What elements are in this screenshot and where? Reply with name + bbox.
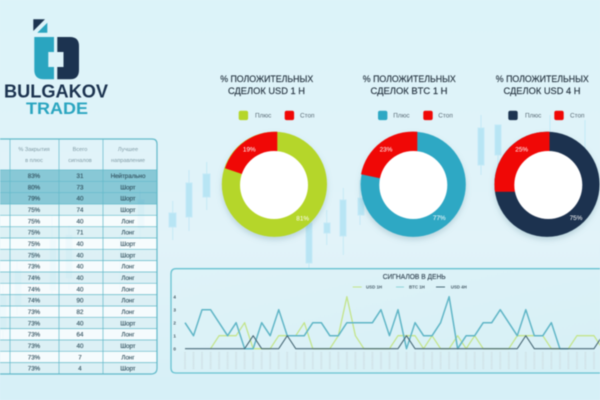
donut chart: 77% — [433, 215, 446, 222]
table rows: 73 — [77, 184, 84, 191]
table rows: 90 — [77, 298, 84, 305]
donut chart: 19% — [243, 146, 256, 154]
panel: donut BTC 1H — [361, 74, 466, 237]
table rows: 74 — [77, 207, 84, 214]
table rows: Нейтрально — [111, 173, 146, 180]
donut chart — [222, 132, 327, 237]
series: USD 4H — [185, 336, 600, 349]
table rows: Лонг — [121, 354, 135, 361]
table rows: 71 — [77, 230, 84, 237]
table rows: Шорт — [120, 320, 136, 327]
table rows: 75% — [28, 207, 41, 214]
donut chart: 25% — [515, 146, 528, 154]
heading: % ПОЛОЖИТЕЛЬНЫХ — [363, 74, 456, 85]
table rows: 40 — [77, 252, 84, 259]
table rows: Лонг — [121, 286, 135, 293]
table rows: 40 — [77, 320, 84, 327]
table rows: 83% — [28, 173, 41, 180]
y axis labels — [173, 294, 176, 351]
table header: направление — [111, 158, 145, 164]
table rows: 74% — [28, 298, 41, 305]
table rows: 40 — [77, 286, 84, 293]
legend: Стоп — [570, 112, 585, 120]
table rows: 73% — [28, 343, 41, 350]
table rows: 7 — [78, 354, 82, 361]
table rows: 73% — [28, 354, 41, 361]
table rows: Шорт — [120, 241, 136, 248]
line series — [185, 297, 600, 349]
table rows: 73% — [28, 332, 41, 339]
panel: donut USD 4H — [494, 74, 600, 237]
table rows: 73% — [28, 320, 41, 327]
legend — [378, 111, 453, 120]
chart legend — [353, 285, 467, 290]
donut chart: 23% — [380, 146, 393, 154]
table rows: Лонг — [121, 230, 135, 237]
table rows: Шорт — [120, 343, 136, 350]
heading: % ПОЛОЖИТЕЛЬНЫХ — [496, 74, 589, 85]
table header: Всего — [73, 147, 87, 153]
table rows: Шорт — [120, 207, 136, 214]
table rows: Лонг — [121, 298, 135, 305]
table rows: 64 — [77, 332, 84, 339]
table rows: Лонг — [121, 275, 135, 282]
table rows: Шорт — [120, 184, 136, 191]
chart legend: USD 1H — [366, 285, 382, 290]
table rows: Лонг — [121, 218, 135, 225]
legend: Стоп — [438, 112, 453, 120]
x axis date ticks — [185, 352, 594, 369]
table rows: 79% — [28, 196, 41, 203]
table rows: 40 — [77, 275, 84, 282]
chart legend: USD 4H — [451, 285, 467, 290]
table rows: Шорт — [120, 196, 136, 203]
table rows: 80% — [28, 184, 41, 191]
donut chart: 81% — [296, 216, 309, 222]
table rows: 31 — [77, 173, 84, 180]
table rows: 40 — [77, 264, 84, 271]
donut chart — [494, 132, 600, 237]
table rows: 75% — [28, 230, 41, 237]
donut chart — [361, 132, 466, 237]
logo: Bulgakov Trade — [4, 19, 108, 118]
heading: СДЕЛОК USD 1 H — [228, 86, 305, 97]
table header: Лучшее — [118, 147, 138, 153]
y axis labels: 3 — [173, 307, 176, 312]
table rows: 40 — [77, 343, 84, 350]
table rows: Лонг — [121, 332, 135, 339]
series: USD 1H — [211, 297, 600, 349]
table rows: 40 — [77, 218, 84, 225]
table rows: 4 — [78, 366, 82, 373]
heading — [220, 74, 314, 97]
table rows: 74% — [28, 275, 41, 282]
text: TRADE: TRADE — [26, 100, 88, 118]
legend: Плюс — [393, 112, 410, 120]
donut chart: 75% — [570, 215, 583, 222]
heading: СДЕЛОК USD 4 H — [504, 86, 581, 97]
legend: Плюс — [525, 112, 542, 120]
table rows: 73% — [28, 264, 41, 271]
table rows: 73% — [28, 309, 41, 316]
table rows: 75% — [28, 218, 41, 225]
table header: % Закрытия — [18, 147, 50, 153]
legend — [239, 111, 315, 120]
table rows: 75% — [28, 252, 41, 259]
table header: в плюс — [25, 158, 43, 164]
heading — [496, 74, 589, 97]
table rows: 73% — [28, 366, 41, 373]
y axis labels: 1 — [173, 333, 176, 338]
table rows — [28, 173, 146, 373]
table header — [18, 147, 145, 164]
heading: % ПОЛОЖИТЕЛЬНЫХ — [220, 74, 314, 85]
table rows: 75% — [28, 241, 41, 248]
text: BULGAKOV: BULGAKOV — [4, 82, 108, 102]
chart legend: BTC 1H — [409, 285, 425, 290]
y axis labels: 2 — [173, 320, 176, 325]
table header: сигналов — [68, 158, 92, 164]
table rows: Лонг — [121, 264, 135, 271]
series: BTC 1H — [185, 297, 568, 349]
table rows: 40 — [77, 241, 84, 248]
panel: donut USD 1H — [220, 74, 327, 237]
panel: signals per day line chart — [171, 269, 600, 373]
table rows: 40 — [77, 196, 84, 203]
table rows: 82 — [77, 309, 84, 316]
icon: logo mark — [33, 19, 79, 79]
table rows: 74% — [28, 286, 41, 293]
legend: Стоп — [300, 112, 315, 120]
y axis labels: 0 — [173, 346, 176, 351]
chart title: СИГНАЛОВ В ДЕНЬ — [383, 272, 446, 281]
heading — [363, 74, 456, 97]
table rows: Шорт — [120, 252, 136, 259]
table rows: Шорт — [120, 366, 136, 373]
table rows: Лонг — [121, 309, 135, 316]
heading: СДЕЛОК BTC 1 H — [370, 86, 448, 97]
panel: signals table — [0, 139, 157, 374]
legend — [508, 111, 585, 120]
legend: Плюс — [255, 112, 272, 120]
y axis labels: 4 — [173, 294, 176, 299]
